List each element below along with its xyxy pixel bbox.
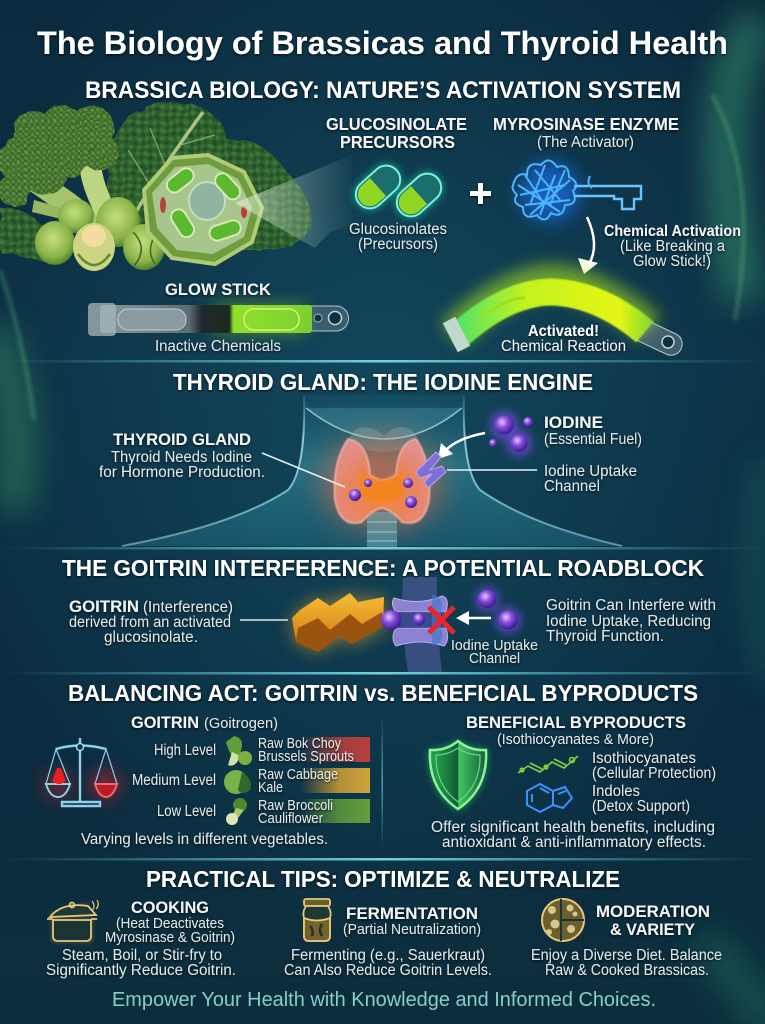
plus sign <box>470 183 491 204</box>
text: molecule labels <box>592 750 716 815</box>
footer tagline: Empower Your Health with Knowledge and Informed Choices. <box>112 989 656 1011</box>
text: molecule labels: Isothiocyanates <box>592 750 696 767</box>
label: iodine uptake channel <box>544 463 637 495</box>
text: cooking: Significantly Reduce Goitrin. <box>46 962 236 979</box>
text: varying levels: Varying levels in different vegetables. <box>81 831 328 848</box>
label: glucosinolates: (Precursors) <box>358 236 438 253</box>
heading: thyroid gland: THYROID GLAND: THE IODINE ENGINE <box>173 369 593 395</box>
panel: thyroid gland <box>99 369 642 547</box>
text: fermentation: Fermenting (e.g., Sauerkraut) <box>291 947 485 964</box>
panel: balancing act <box>43 680 716 851</box>
heading: beneficial byproducts: (Isothiocyanates & More) <box>497 732 654 748</box>
text: health benefits <box>431 819 715 851</box>
label: thyroid gland: THYROID GLAND <box>113 431 251 449</box>
label: activated: Chemical Reaction <box>501 338 626 355</box>
label: thyroid gland: Thyroid Needs Iodine <box>111 449 252 466</box>
label: goitrin: derived from an activated <box>69 614 231 631</box>
label: thyroid gland: for Hormone Production. <box>99 464 265 481</box>
kale leaves <box>0 102 312 262</box>
text: vegetables by level: Brussels Sprouts <box>258 749 354 765</box>
heading: brassica biology: BRASSICA BIOLOGY: NATURE’S ACTIVATION SYSTEM <box>85 77 681 104</box>
illustration: activated glow stick <box>449 280 682 355</box>
text: level labels: Medium Level <box>132 772 216 789</box>
icon: balanced plate <box>542 899 584 941</box>
label: iodine <box>544 414 642 448</box>
text: moderation and variety: MODERATION <box>596 903 710 921</box>
text: cooking: (Heat Deactivates <box>116 916 224 932</box>
magnifying light cone <box>235 155 352 248</box>
label: activated <box>501 323 626 355</box>
heading: goitrin: GOITRIN <box>131 714 199 732</box>
heading: goitrin interference: THE GOITRIN INTERFERENCE: A POTENTIAL ROADBLOCK <box>62 555 704 581</box>
icon: shield <box>429 740 487 811</box>
text: vegetables by level: Raw Cabbage <box>258 767 338 783</box>
icon: balance scale <box>43 738 120 806</box>
text: fermentation <box>284 905 492 979</box>
label: myrosinase enzyme <box>493 114 679 151</box>
text: moderation and variety <box>531 903 722 979</box>
leader line: goitrin <box>240 619 288 621</box>
label: iodine: IODINE <box>544 414 603 432</box>
icon: isothiocyanate molecule <box>518 756 578 773</box>
panel: goitrin interference <box>62 555 716 672</box>
panel: brassica biology <box>0 77 741 355</box>
label: inactive chemicals: Inactive Chemicals <box>155 338 281 355</box>
text: cooking: Myrosinase & Goitrin) <box>105 930 235 946</box>
label: iodine uptake channel: Channel <box>544 478 600 495</box>
text: cooking: Steam, Boil, or Stir-fry to <box>62 947 222 964</box>
icons: vegetables by level <box>224 736 252 825</box>
panel: practical tips <box>46 866 722 979</box>
plant cell <box>144 155 262 264</box>
label: activated: Activated! <box>528 323 599 340</box>
illustration: thyroid gland <box>324 439 440 547</box>
text: interference description: Goitrin Can Interfere with <box>546 597 716 614</box>
label: chemical activation: Glow Stick!) <box>633 253 711 270</box>
icon: fermentation jar <box>303 899 331 941</box>
heading: beneficial byproducts: BENEFICIAL BYPRODUCTS <box>466 714 686 732</box>
heading: beneficial byproducts <box>466 714 686 748</box>
label: chemical activation: (Like Breaking a <box>620 238 725 255</box>
illustration: inactive glow stick <box>88 303 348 336</box>
label: myrosinase enzyme: (The Activator) <box>537 134 634 151</box>
icon: myrosinase enzyme key <box>512 160 641 222</box>
label: glucosinolate precursors: PRECURSORS <box>340 132 455 152</box>
heading: goitrin <box>131 714 278 732</box>
heading: balancing act: BALANCING ACT: GOITRIN vs. BENEFICIAL BYPRODUCTS <box>68 680 698 706</box>
label: chemical activation <box>604 223 741 270</box>
label: uptake channel <box>451 638 538 667</box>
label: glucosinolate precursors <box>326 114 467 152</box>
heading: practical tips: PRACTICAL TIPS: OPTIMIZE & NEUTRALIZE <box>146 866 620 892</box>
text: vegetables by level: Cauliflower <box>258 811 323 827</box>
label: glucosinolates: Glucosinolates <box>349 221 447 238</box>
icon: cooking pot <box>47 900 98 941</box>
text: health benefits: antioxidant & anti-inflammatory effects. <box>442 834 706 851</box>
text: fermentation: FERMENTATION <box>346 905 478 923</box>
heading: goitrin: (Goitrogen) <box>204 716 278 732</box>
level bars <box>300 737 370 823</box>
text: molecule labels: (Detox Support) <box>592 798 690 815</box>
label: thyroid gland <box>99 431 265 481</box>
text: level labels: Low Level <box>157 803 216 820</box>
icon: iodine uptake channel <box>416 452 446 488</box>
label: glow stick: GLOW STICK <box>165 280 272 299</box>
illustration: channel membrane <box>392 577 448 672</box>
label: goitrin <box>69 598 233 646</box>
label: myrosinase enzyme: MYROSINASE ENZYME <box>493 114 679 134</box>
text: health benefits: Offer significant health benefits, including <box>431 819 715 836</box>
text: vegetables by level <box>258 736 354 827</box>
icon: glucosinolate capsules <box>347 157 450 225</box>
text: moderation and variety: Enjoy a Diverse Diet. Balance <box>531 947 722 964</box>
text: molecule labels: (Cellular Protection) <box>592 765 716 782</box>
text: cooking: COOKING <box>131 899 209 917</box>
text: moderation and variety: Raw & Cooked Brassicas. <box>545 962 709 979</box>
text: level labels <box>132 742 216 820</box>
label: uptake channel: Iodine Uptake <box>451 638 538 654</box>
label: uptake channel: Channel <box>469 651 520 667</box>
neck illustration <box>122 395 622 546</box>
text: fermentation: Can Also Reduce Goitrin Levels. <box>284 962 492 979</box>
icon: red X block <box>429 607 454 633</box>
text: level labels: High Level <box>154 742 216 759</box>
label: glucosinolate precursors: GLUCOSINOLATE <box>326 114 467 134</box>
illustration: brassica vegetables with cell cross-section <box>0 102 352 271</box>
text: vegetables by level: Raw Broccoli <box>258 798 333 814</box>
arrow: iodine blocked <box>456 611 491 625</box>
text: cooking <box>46 899 236 979</box>
text: molecule labels: Indoles <box>592 783 640 800</box>
label: chemical activation: Chemical Activation <box>604 223 741 240</box>
label: goitrin: GOITRIN <box>69 598 139 616</box>
icon: indole molecule <box>527 784 572 812</box>
icon: iodine molecules blocked <box>381 586 522 634</box>
label: goitrin: glucosinolate. <box>104 629 198 646</box>
text: fermentation: (Partial Neutralization) <box>343 922 481 938</box>
brussels sprouts <box>35 197 165 271</box>
label: iodine uptake channel: Iodine Uptake <box>544 463 637 480</box>
illustration: goitrin crystal <box>292 593 384 652</box>
text: interference description: Thyroid Function. <box>546 628 664 645</box>
text: moderation and variety: & VARIETY <box>610 921 695 939</box>
broccoli <box>0 105 128 250</box>
title: The Biology of Brassicas and Thyroid Health <box>37 25 728 61</box>
leader line: thyroid <box>262 453 345 487</box>
arrow: iodine to channel <box>438 433 485 459</box>
text: interference description <box>546 597 716 645</box>
leader line: channel <box>447 469 537 471</box>
icon: iodine molecules <box>489 410 533 457</box>
text: vegetables by level: Kale <box>258 780 283 796</box>
arrow: enzyme to activation <box>578 217 598 274</box>
label: iodine: (Essential Fuel) <box>544 431 642 448</box>
label: goitrin: (Interference) <box>143 599 233 616</box>
text: vegetables by level: Raw Bok Choy <box>258 736 342 752</box>
label: glucosinolates <box>349 221 447 253</box>
text: interference description: Iodine Uptake, Reducing <box>546 613 711 630</box>
